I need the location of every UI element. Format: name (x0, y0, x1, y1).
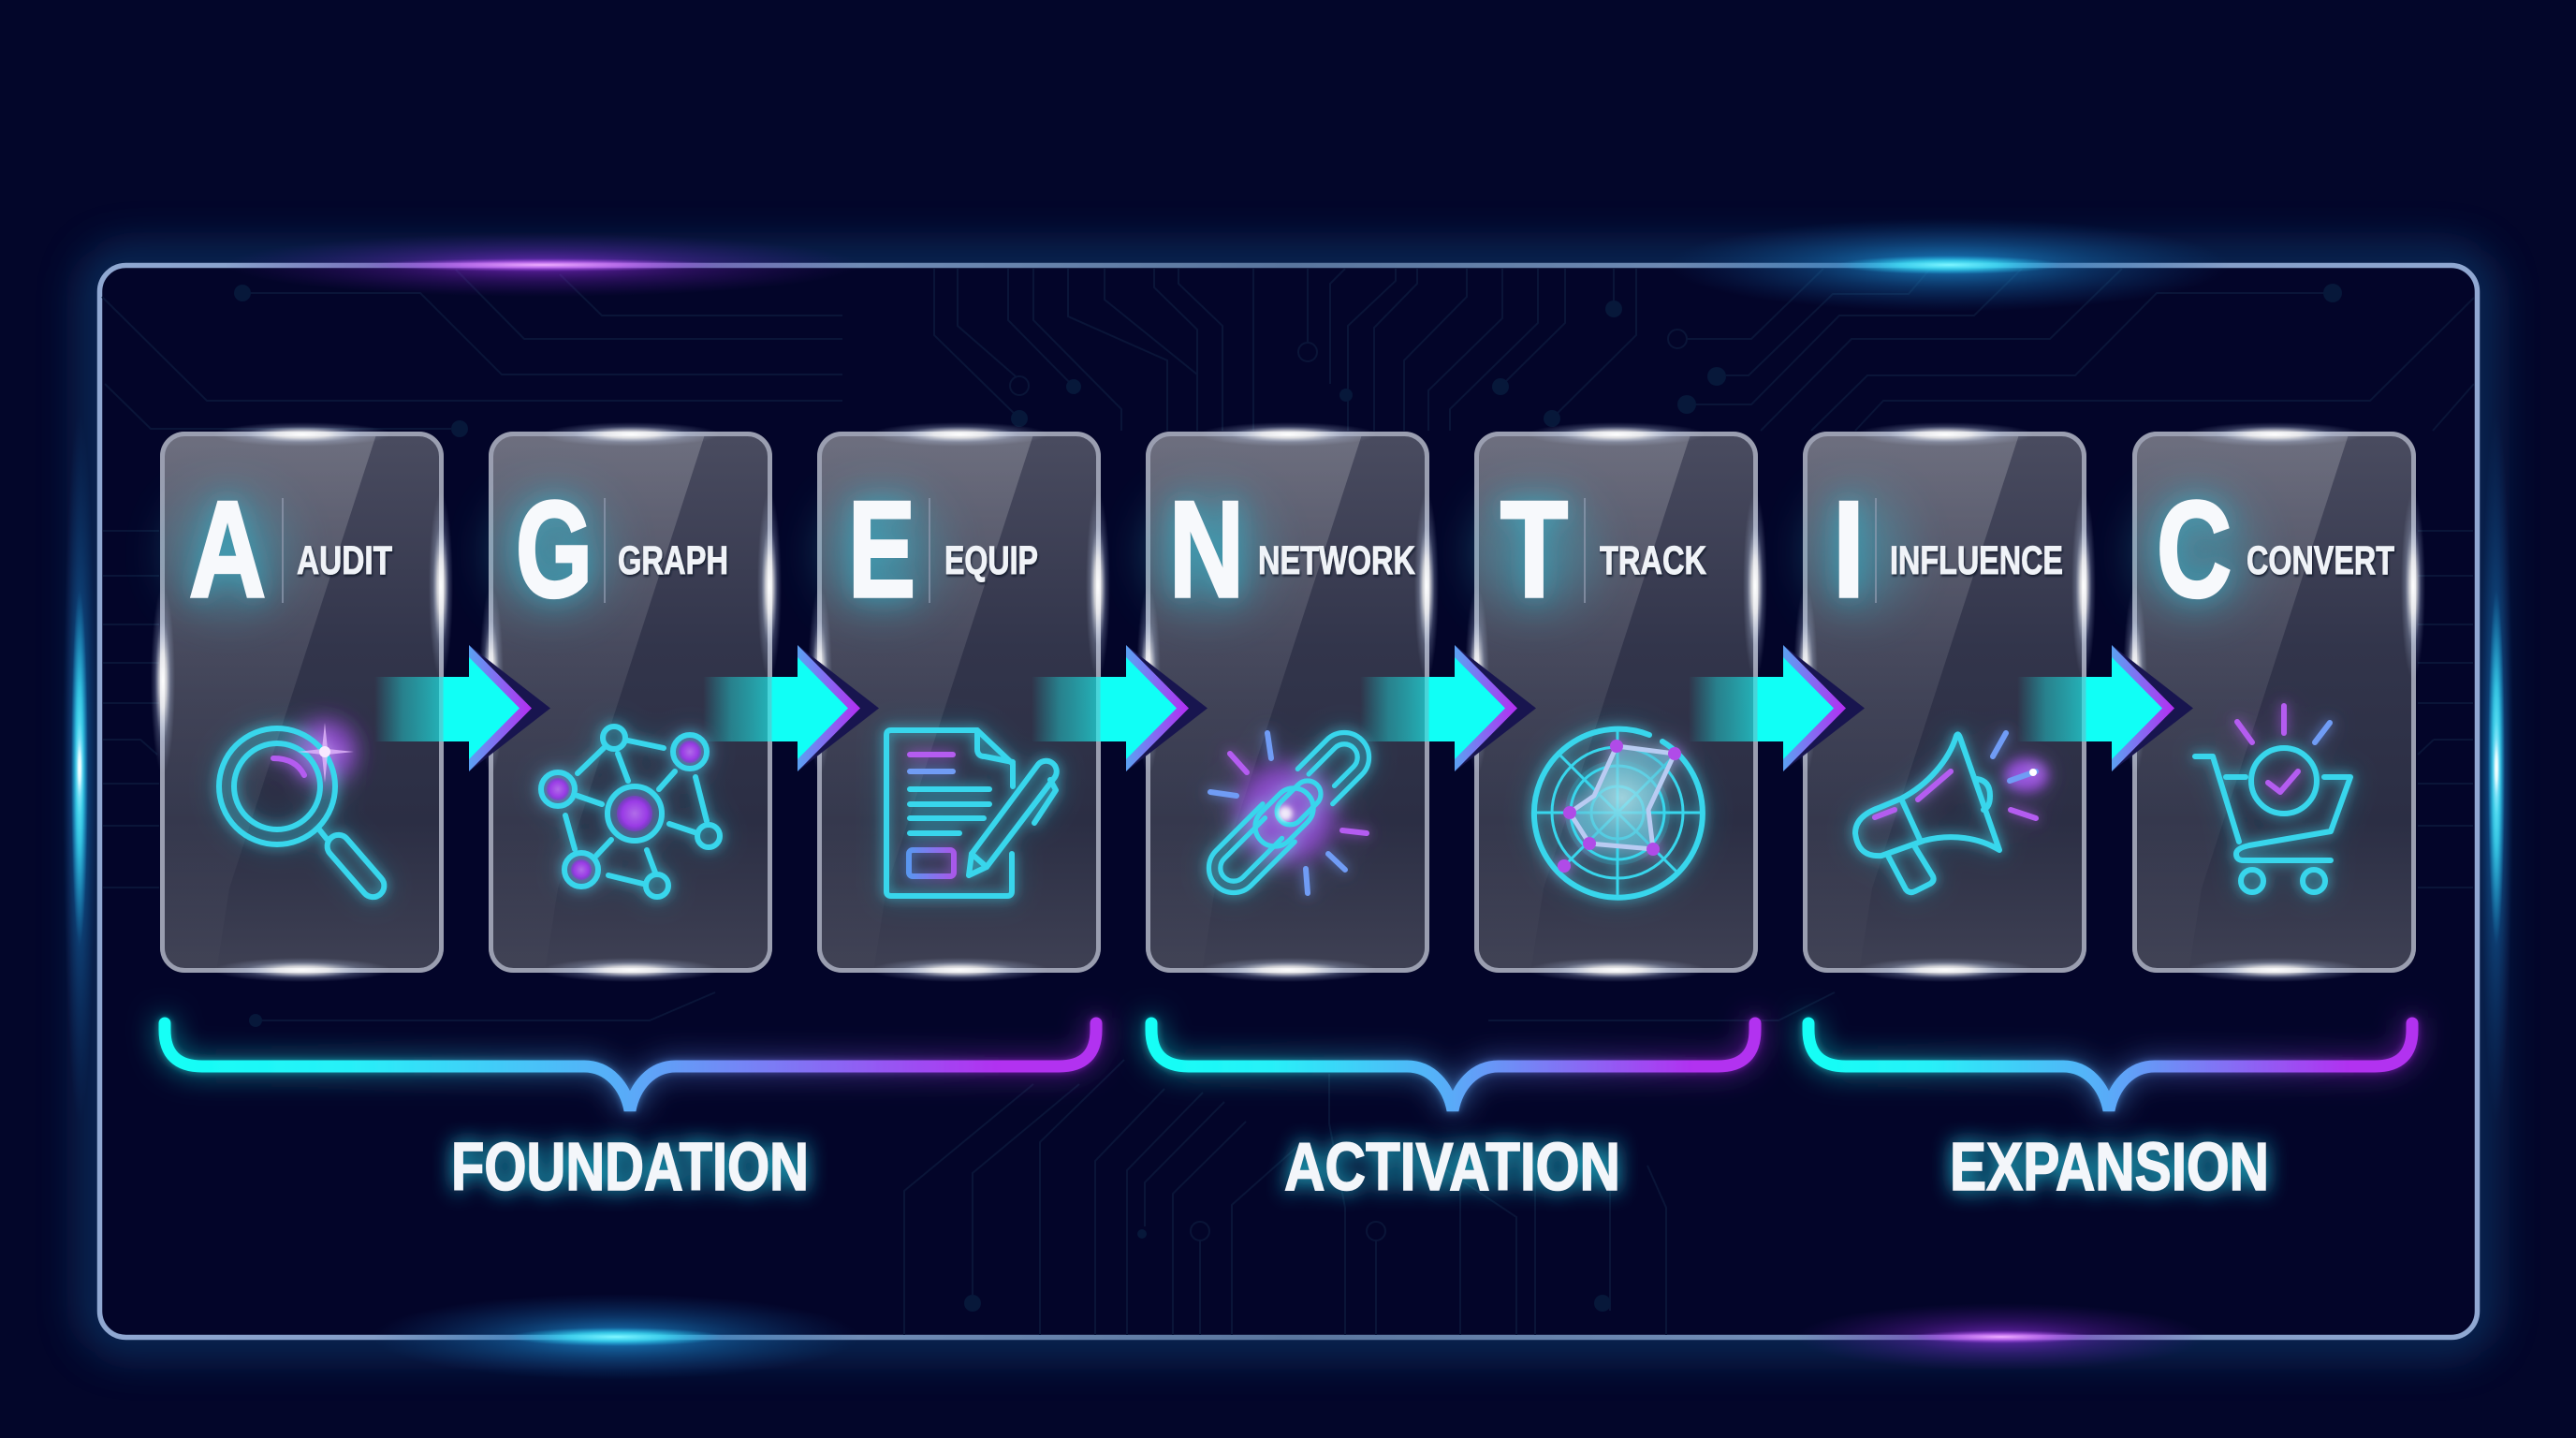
icon: megaphone (1855, 733, 2047, 892)
icon: radar chart (1533, 728, 1703, 898)
light flare: top purple (225, 233, 861, 297)
icon: network graph (541, 726, 720, 897)
card: Influence: I (1833, 473, 1865, 625)
light flare: top cyan (1668, 218, 2230, 312)
card: Network: NETWORK (1258, 539, 1415, 583)
card: Convert: CONVERT (2247, 539, 2394, 583)
bracket: foundation (165, 1023, 1096, 1110)
arrow: graph to equip (703, 645, 879, 771)
card: Network: N (1169, 473, 1244, 625)
card: Track: TRACK (1600, 539, 1706, 583)
arrow: influence to convert (2017, 645, 2193, 771)
arrow: audit to graph (374, 645, 550, 771)
card: Audit (151, 422, 453, 982)
card: Graph: G (516, 473, 593, 625)
card: Track: T (1500, 473, 1568, 625)
circuit board background pattern (102, 269, 2474, 1335)
bracket: activation (1151, 1023, 1755, 1110)
arrow: network to track (1360, 645, 1536, 771)
light flare: bottom cyan (373, 1294, 859, 1380)
bracket: expansion (1808, 1023, 2412, 1110)
card: Equip (808, 422, 1110, 982)
card: Network (1136, 422, 1439, 982)
card: Convert: C (2157, 473, 2232, 625)
card: Audit: AUDIT (297, 539, 392, 583)
light streak: right (2480, 412, 2513, 1123)
heading: activation: ACTIVATION (1284, 1130, 1620, 1205)
card: Influence (1793, 422, 2096, 982)
card: Graph: GRAPH (618, 539, 728, 583)
card: Audit: A (189, 473, 266, 625)
outer frame glow (99, 265, 2477, 1337)
arrow: equip to network (1032, 645, 1208, 771)
heading: expansion: EXPANSION (1950, 1130, 2269, 1205)
light flare: bottom purple (1795, 1303, 2207, 1371)
card: Track (1465, 422, 1767, 982)
light streak: left (63, 412, 96, 1123)
card: Graph (479, 422, 782, 982)
card: Equip: EQUIP (944, 539, 1038, 583)
icon: document and pen (886, 730, 1057, 896)
card: Convert (2123, 422, 2425, 982)
card: Influence: INFLUENCE (1890, 539, 2063, 583)
icon: shopping cart with check (2195, 706, 2350, 892)
arrow: track to influence (1689, 645, 1865, 771)
frame panel (99, 266, 2477, 1337)
heading: foundation: FOUNDATION (451, 1130, 809, 1205)
icon: broken chain link (1199, 723, 1379, 902)
icon: magnifying glass (219, 723, 388, 902)
card: Equip: E (848, 473, 915, 625)
